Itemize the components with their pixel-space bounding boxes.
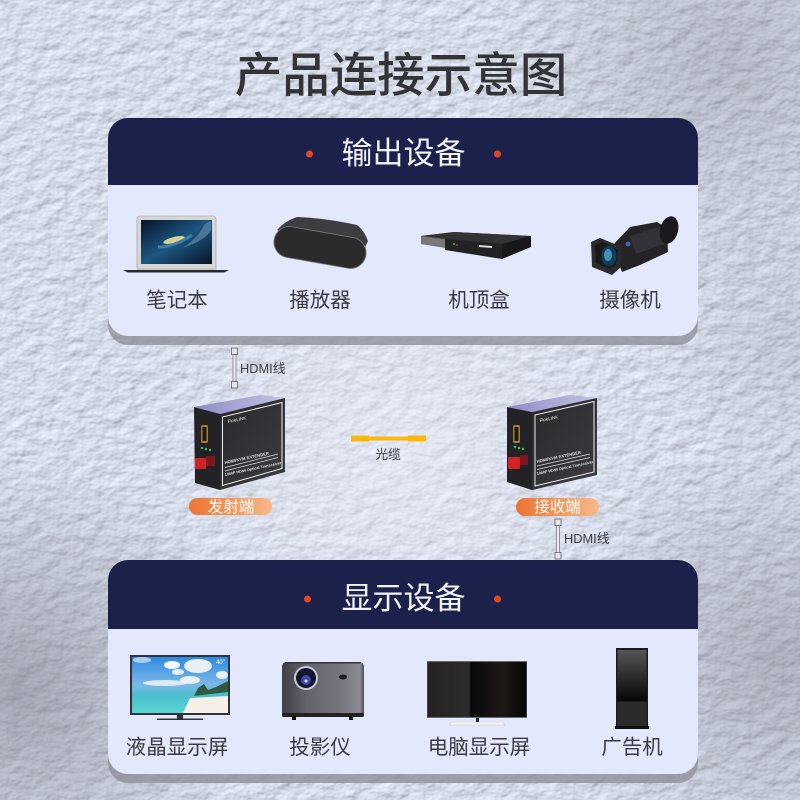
logo: FineLINK <box>539 414 559 423</box>
label: 摄像机 <box>599 289 661 312</box>
logo: FineLINK <box>227 415 247 424</box>
icon: set-top box <box>421 232 531 259</box>
panel: output devices <box>108 118 698 345</box>
product subtitle: 1080P HDMI Optical Transceiver <box>536 460 594 476</box>
heading: output devices: 输出设备 <box>342 136 466 171</box>
icon: laptop <box>123 216 229 272</box>
ports <box>195 425 215 469</box>
product subtitle: 1080P HDMI Optical Transceiver <box>224 461 282 477</box>
icon: LCD TV <box>130 655 230 720</box>
icon: projector <box>282 662 364 720</box>
icon: camcorder <box>591 214 681 275</box>
badge: transmitter: 发射端 <box>208 498 254 516</box>
ports <box>508 425 528 469</box>
label: 机顶盒 <box>448 289 510 312</box>
label: 笔记本 <box>146 289 208 312</box>
product text: HDMI/KVM EXTENDER <box>536 450 581 464</box>
fiber cable <box>351 436 426 442</box>
product text: HDMI/KVM EXTENDER <box>224 451 269 465</box>
label: 电脑显示屏 <box>428 736 530 759</box>
device: receiver <box>507 395 597 490</box>
label: 液晶显示屏 <box>126 736 228 759</box>
panel: display devices <box>108 560 698 783</box>
icon: LCD TV: 40" <box>216 660 225 666</box>
cable: lower HDMI <box>555 519 561 559</box>
label: fiber: 光缆 <box>375 447 401 462</box>
label: 投影仪 <box>289 736 351 759</box>
heading: display devices: 显示设备 <box>342 581 466 616</box>
label: upper HDMI: HDMI线 <box>240 361 286 376</box>
title: 产品连接示意图 <box>235 50 567 103</box>
badge: receiver: 接收端 <box>534 498 581 516</box>
icon: speaker <box>272 217 368 271</box>
cable: upper HDMI <box>232 348 238 388</box>
badge: receiver <box>516 498 599 516</box>
heading: output devices <box>306 136 501 171</box>
label: lower HDMI: HDMI线 <box>564 531 610 546</box>
device: transmitter <box>194 395 285 490</box>
badge: transmitter <box>189 498 272 516</box>
icon: computer monitor <box>427 661 527 725</box>
label: 广告机 <box>601 736 663 759</box>
label: 播放器 <box>289 289 351 312</box>
icon: advertising kiosk <box>615 648 649 729</box>
heading: display devices <box>304 581 501 616</box>
